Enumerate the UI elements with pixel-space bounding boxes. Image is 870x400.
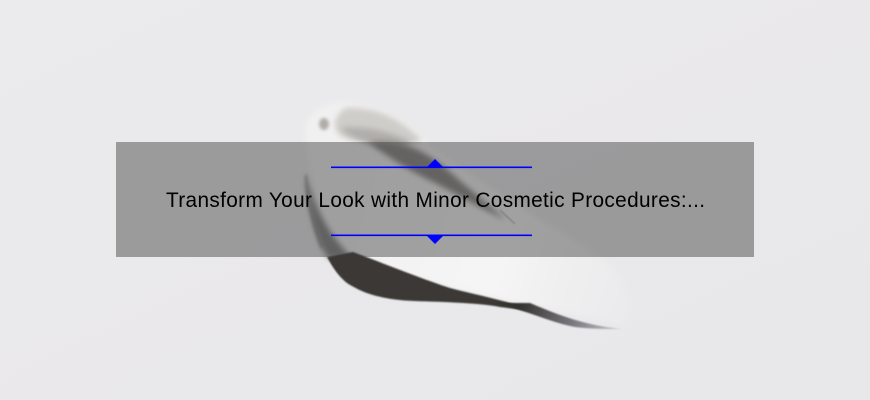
smear: thin dark left edge	[306, 175, 322, 248]
cream smear photo	[305, 102, 631, 329]
smear: thin crease	[500, 210, 515, 224]
smear: tapering tail	[495, 303, 622, 329]
bottom ornament line with diamond	[331, 234, 532, 244]
smear: small fold spot	[319, 118, 329, 130]
smear: dark underside shadow	[327, 252, 535, 311]
smear: soft band under ridge	[340, 128, 412, 146]
smear: cream body	[305, 102, 631, 325]
smear: grey top ridge	[335, 108, 422, 145]
smear: diagonal crease	[368, 141, 505, 220]
smear: grey shadow on left edge	[306, 175, 352, 258]
translucent title banner	[116, 142, 754, 257]
top ornament line with diamond	[331, 159, 532, 168]
title: Transform Your Look with Minor Cosmetic Procedures:...	[166, 189, 705, 212]
